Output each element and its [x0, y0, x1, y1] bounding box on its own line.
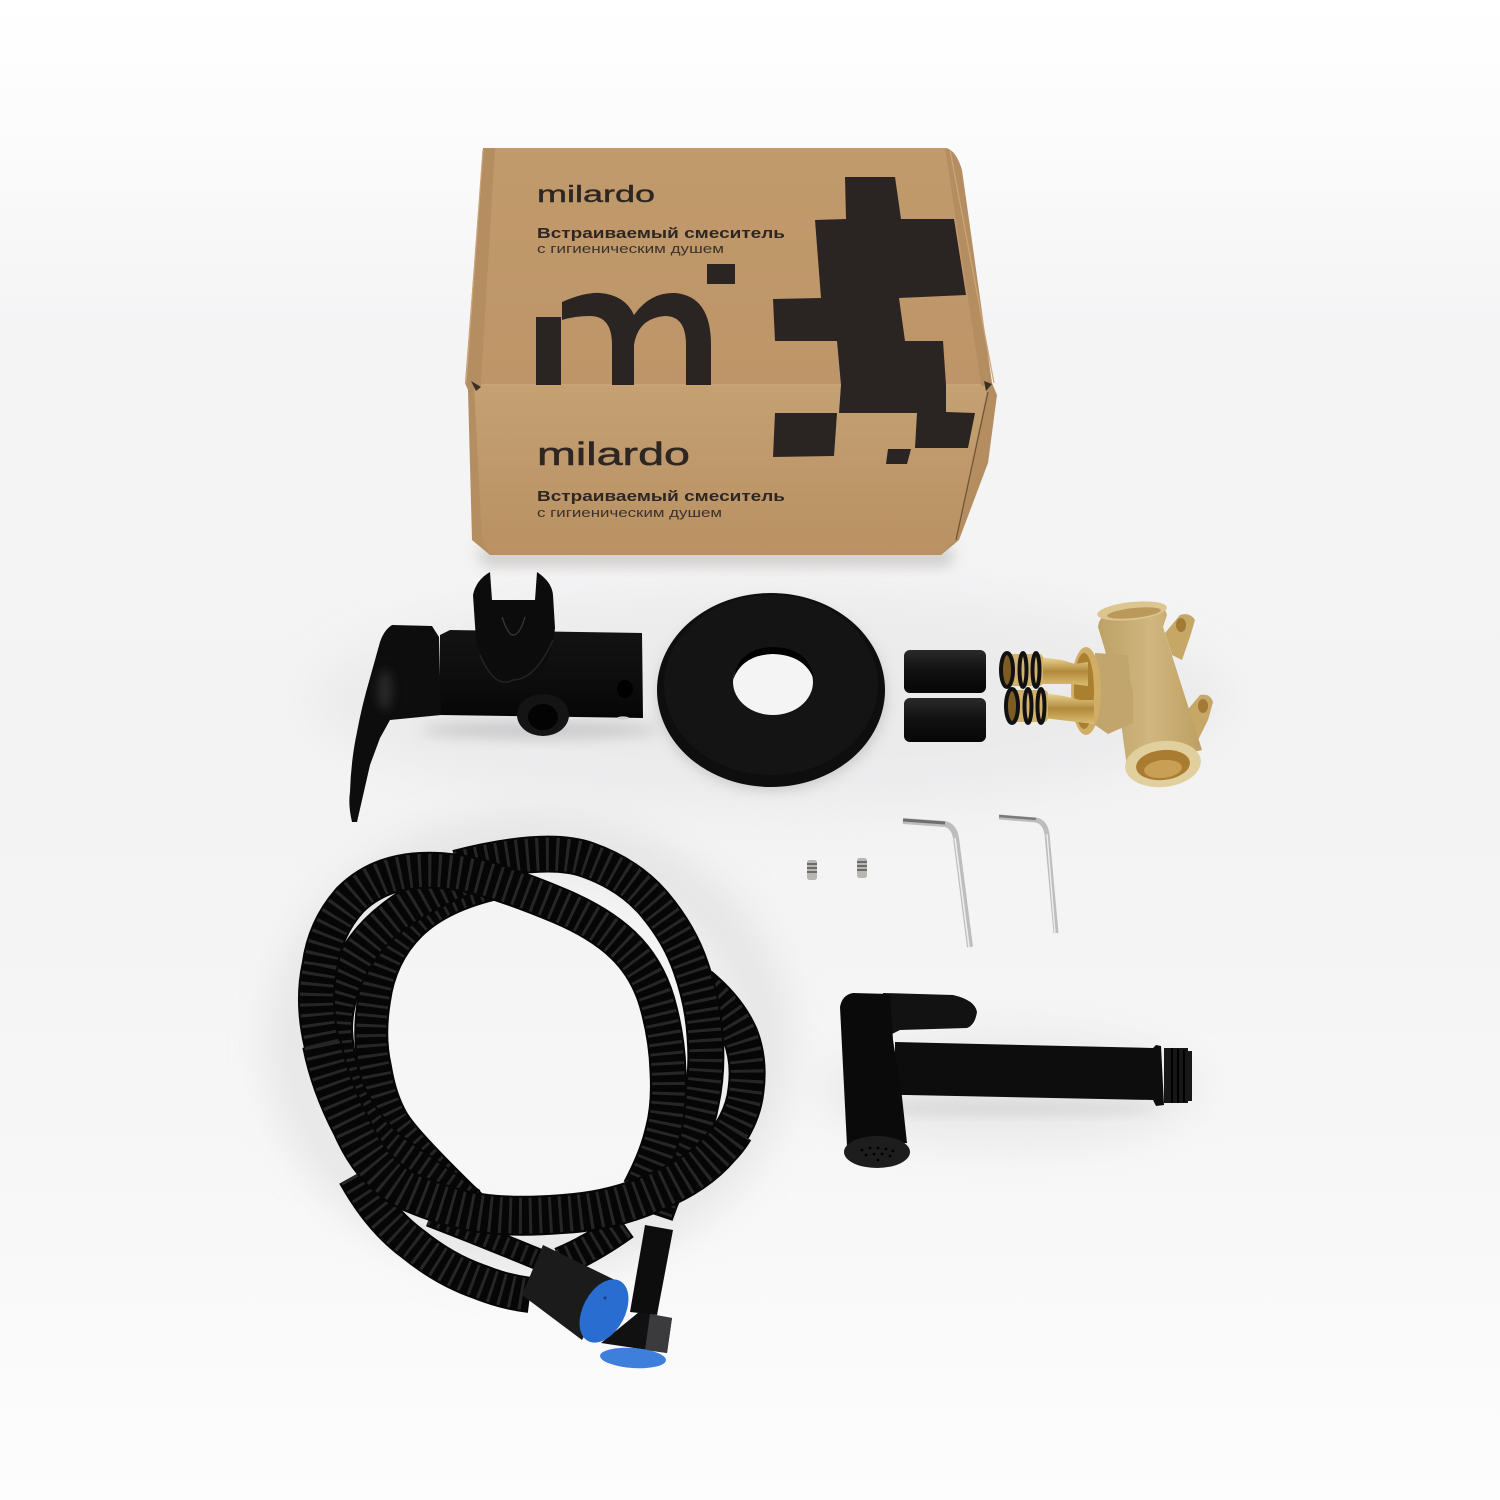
- flexible black hose: [316, 854, 747, 1295]
- upper cartridge: [1001, 653, 1088, 687]
- front brand text: milardo: [537, 436, 690, 472]
- shower lever: [883, 993, 977, 1035]
- shower tube: [895, 1042, 1164, 1106]
- hose conical connector: [522, 1245, 639, 1351]
- hex key large: [903, 820, 970, 947]
- valve ears: [1165, 614, 1213, 740]
- box lid face: [481, 148, 981, 384]
- hose tail: [430, 1216, 545, 1262]
- disc centre hole: [733, 649, 813, 715]
- large m logo: [536, 264, 735, 385]
- shower face: [844, 1136, 910, 1168]
- lower cartridge: [1006, 689, 1094, 724]
- hose coil front strand: [322, 1044, 734, 1216]
- fold details: [466, 150, 994, 540]
- pixel block lower left: [773, 413, 837, 457]
- black pixel pattern: [773, 177, 975, 448]
- hose coil lower strand: [355, 1175, 625, 1295]
- panel: kraft cardboard box: [465, 148, 997, 566]
- hose coil main strand: [316, 870, 668, 1190]
- grub screw right: [857, 858, 867, 878]
- rubber sleeve upper: [904, 650, 986, 693]
- front product title: Встраиваемый смеситель: [537, 488, 785, 505]
- lid brand text: milardo: [537, 181, 655, 207]
- lever handle: [349, 625, 441, 822]
- brass valve: [1001, 598, 1213, 791]
- side port: [517, 694, 569, 736]
- escutcheon disc: [657, 593, 886, 790]
- mixer cylinder: [440, 630, 643, 718]
- holder inner V mark: [502, 617, 525, 635]
- rubber sleeve lower: [904, 698, 986, 742]
- lid product title: Встраиваемый смеситель: [537, 225, 785, 242]
- hose elbow connector: [599, 1225, 673, 1370]
- shower threads: [1164, 1048, 1192, 1103]
- box silhouette and side flaps: [465, 148, 997, 555]
- elbow hex nut: [601, 1312, 672, 1353]
- elbow blue cap: [599, 1346, 667, 1370]
- lid product subtitle: с гигиеническим душем: [537, 242, 724, 256]
- hose coil middle left strand: [335, 876, 470, 1205]
- lever highlight: [378, 670, 392, 710]
- threaded outlet: [1123, 737, 1203, 791]
- pixel block small: [886, 449, 911, 464]
- set screw holes: [617, 680, 633, 720]
- hex key small: [999, 816, 1056, 933]
- valve main tube: [1098, 603, 1202, 767]
- hose coil right loop strand: [700, 985, 747, 1168]
- valve blocks: [1095, 653, 1133, 734]
- mixer body with lever and hose holder: [349, 572, 660, 822]
- hygienic shower head: [840, 993, 1192, 1168]
- conical connector blue cap: [569, 1271, 639, 1351]
- valve flange: [1071, 647, 1101, 735]
- grub screw left: [807, 860, 817, 880]
- soft studio shadows: [295, 590, 1230, 1250]
- hose holder: [473, 572, 555, 682]
- front product subtitle: с гигиеническим душем: [537, 506, 722, 520]
- hose coil outer right strand: [457, 854, 706, 1215]
- hose coil inner left strand: [371, 882, 500, 1205]
- box front face: [474, 386, 988, 555]
- shower head cylinder: [840, 993, 907, 1146]
- holder outline: [480, 640, 553, 682]
